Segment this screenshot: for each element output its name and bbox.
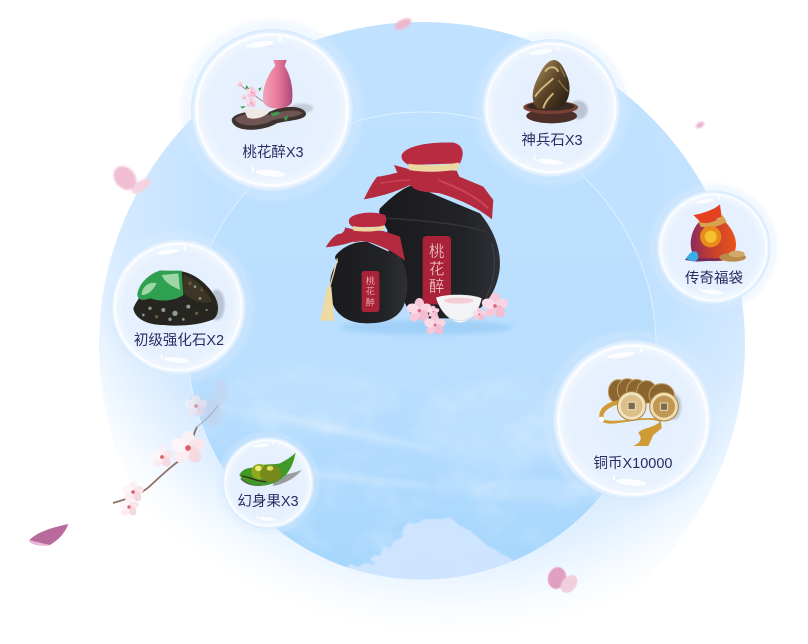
bubble: 传奇福袋 (650, 184, 777, 311)
large jar (364, 143, 500, 318)
icon: green fruit on leaf (239, 453, 302, 486)
label: 初级强化石X2 (134, 332, 224, 349)
icon: copper coins (599, 379, 681, 446)
small jar: 桃 (366, 275, 375, 286)
illustration: cherry blossom branch (113, 379, 228, 517)
icon: green ore rock (133, 271, 225, 326)
small jar (320, 213, 407, 323)
petal: top centre (393, 16, 413, 32)
large jar: 醉 (429, 278, 444, 295)
bubble: 初级强化石X2 (102, 231, 254, 383)
main illustration: two wine jars with cup and blossoms (320, 143, 513, 336)
tea cup (436, 295, 482, 323)
background: inner sky circle with clouds (180, 112, 670, 592)
large jar: 桃 (429, 244, 444, 261)
bubble: 幻身果X3 (216, 431, 320, 535)
label: 传奇福袋 (685, 270, 743, 287)
blossoms (406, 293, 509, 336)
small jar: 花 (366, 287, 375, 297)
small jar: 醉 (366, 296, 375, 307)
icon: bottle on tray (232, 60, 313, 130)
bubble: 铜币X10000 (543, 330, 723, 510)
label: 神兵石X3 (521, 132, 583, 149)
label: 铜币X10000 (594, 455, 672, 472)
icon: divine stone on stand (523, 60, 588, 123)
large jar: 花 (429, 261, 444, 278)
petal: bottom right pair (545, 565, 581, 596)
petal: top right (695, 120, 705, 130)
icon: lucky bag (685, 204, 746, 262)
bubble: 桃花醉X3 (181, 19, 363, 201)
background: large pale blue circle (99, 22, 745, 644)
petal: left pair (109, 162, 153, 196)
jar shadow (340, 320, 513, 335)
bubble: 神兵石X3 (474, 31, 628, 185)
label: 桃花醉X3 (242, 144, 304, 161)
label: 幻身果X3 (237, 493, 299, 510)
petal: bottom left (29, 524, 68, 546)
